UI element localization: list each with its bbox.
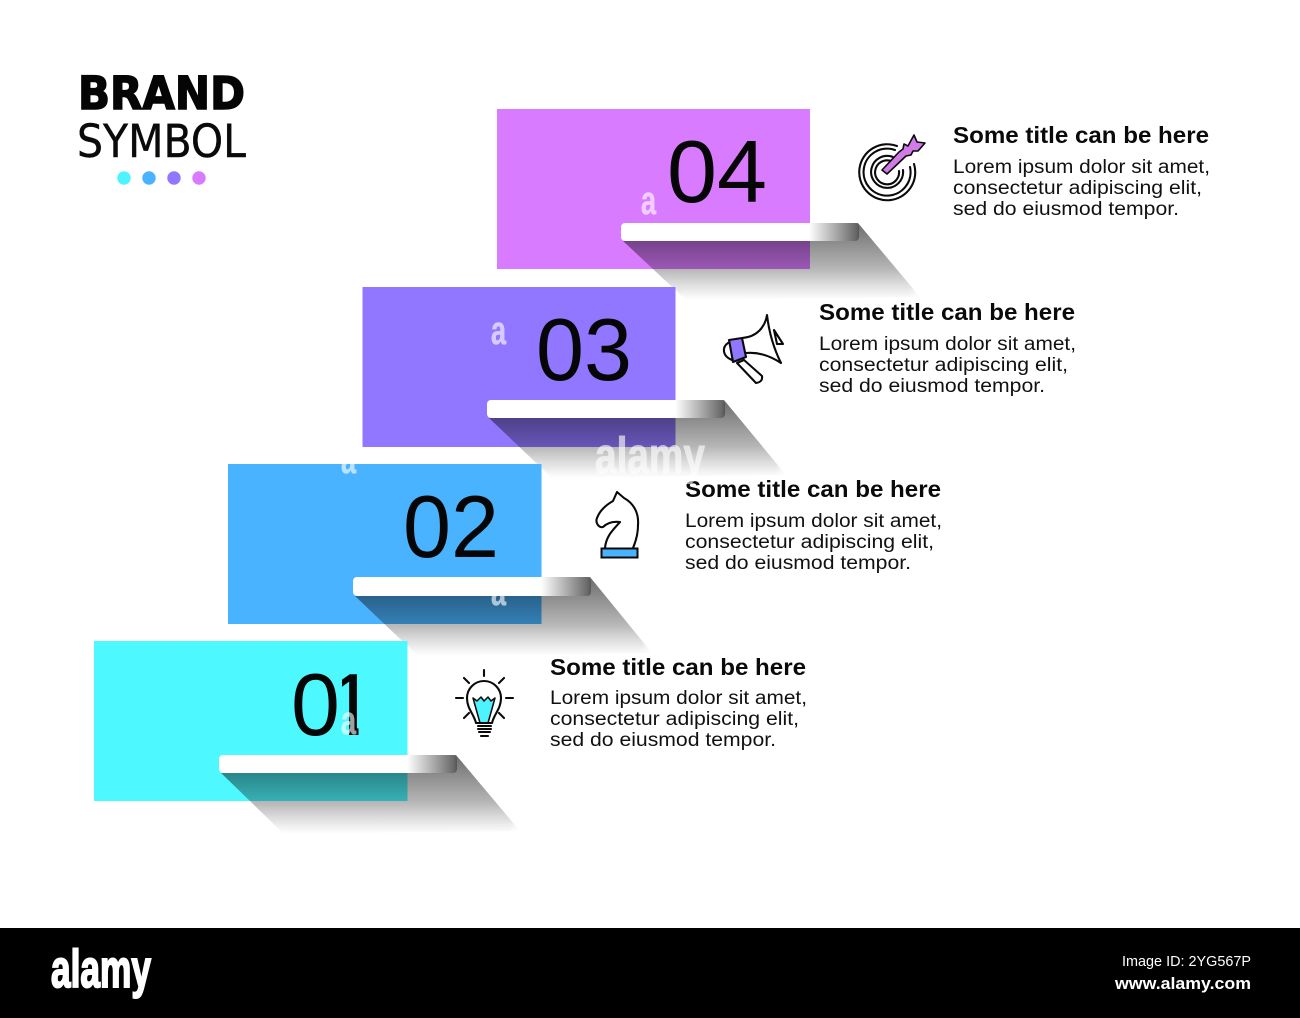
body 04: consectetur adipiscing elit,: [953, 178, 1202, 199]
icon: chess knight: [596, 492, 638, 558]
icon: megaphone: [724, 315, 783, 383]
title 01: Some title can be here: [550, 654, 806, 680]
footer bar: [0, 928, 1300, 1018]
body 02: Lorem ipsum dolor sit amet,: [685, 511, 942, 532]
logo: brand symbol: [77, 67, 246, 185]
logo word: BRAND: BRAND: [78, 67, 245, 120]
step 04: [497, 109, 1210, 314]
icon: target with arrow: [859, 135, 925, 200]
number 01: [291, 655, 378, 754]
body 01: sed do eiusmod tempor.: [550, 730, 776, 751]
body 03: Lorem ipsum dolor sit amet,: [819, 334, 1076, 355]
image id: Image ID: 2YG567P: [1122, 953, 1251, 970]
watermark overlay: [341, 179, 705, 743]
body 04: sed do eiusmod tempor.: [953, 199, 1179, 220]
number 04: 04: [667, 122, 767, 221]
body 04: [953, 157, 1210, 220]
panel: step 02 block: [228, 464, 542, 624]
watermark overlay: a: [341, 699, 357, 743]
shelf shadow 01: [221, 755, 520, 834]
shadow tip fade 04: [908, 278, 944, 314]
shelf shadow 02: [355, 577, 652, 656]
body 03: [819, 334, 1076, 397]
title 04: Some title can be here: [953, 122, 1209, 148]
text block 02: [685, 476, 942, 574]
shadow tip fade 02: [640, 634, 676, 670]
body 01: consectetur adipiscing elit,: [550, 709, 799, 730]
footer logo: alamy: [51, 940, 151, 999]
shadow tip fade 01: [508, 812, 544, 848]
body 01: [550, 688, 807, 751]
shelf shadow 03: [489, 400, 786, 478]
panel: step 03 block: [362, 287, 676, 447]
text block 01: [550, 654, 807, 751]
watermark overlay: alamy: [595, 427, 705, 484]
icon: light bulb: [456, 670, 513, 736]
body 04: Lorem ipsum dolor sit amet,: [953, 157, 1210, 178]
shelf shadow 04: [623, 223, 920, 300]
step 02: [228, 464, 942, 670]
body 02: consectetur adipiscing elit,: [685, 532, 934, 553]
number 01: 0: [291, 655, 340, 754]
number 01: 1: [327, 655, 376, 754]
watermark overlay: a: [341, 438, 357, 482]
number 03: 03: [536, 300, 632, 399]
watermark overlay: a: [491, 309, 507, 353]
body 03: consectetur adipiscing elit,: [819, 355, 1068, 376]
body 01: Lorem ipsum dolor sit amet,: [550, 688, 807, 709]
logo word: SYMBOL: SYMBOL: [77, 115, 246, 168]
number 02: 02: [403, 477, 499, 576]
shelf 02: [353, 577, 591, 596]
text block 04: [953, 122, 1210, 220]
step 03: [362, 287, 1076, 492]
body 02: sed do eiusmod tempor.: [685, 553, 911, 574]
shelf 01: [219, 755, 457, 773]
shadow tip fade 03: [774, 456, 810, 492]
panel: step 04 block: [497, 109, 810, 269]
title 02: Some title can be here: [685, 476, 941, 502]
shelf 03: [487, 400, 725, 418]
title 03: Some title can be here: [819, 299, 1075, 325]
shelf 04: [621, 223, 859, 241]
step 01: [94, 641, 807, 848]
website: www.alamy.com: [1114, 974, 1251, 993]
watermark overlay: a: [491, 570, 507, 614]
panel: step 01 block: [94, 641, 408, 801]
body 02: [685, 511, 942, 574]
watermark overlay: a: [641, 179, 657, 223]
logo dots: [117, 171, 206, 185]
text block 03: [819, 299, 1076, 397]
body 03: sed do eiusmod tempor.: [819, 376, 1045, 397]
